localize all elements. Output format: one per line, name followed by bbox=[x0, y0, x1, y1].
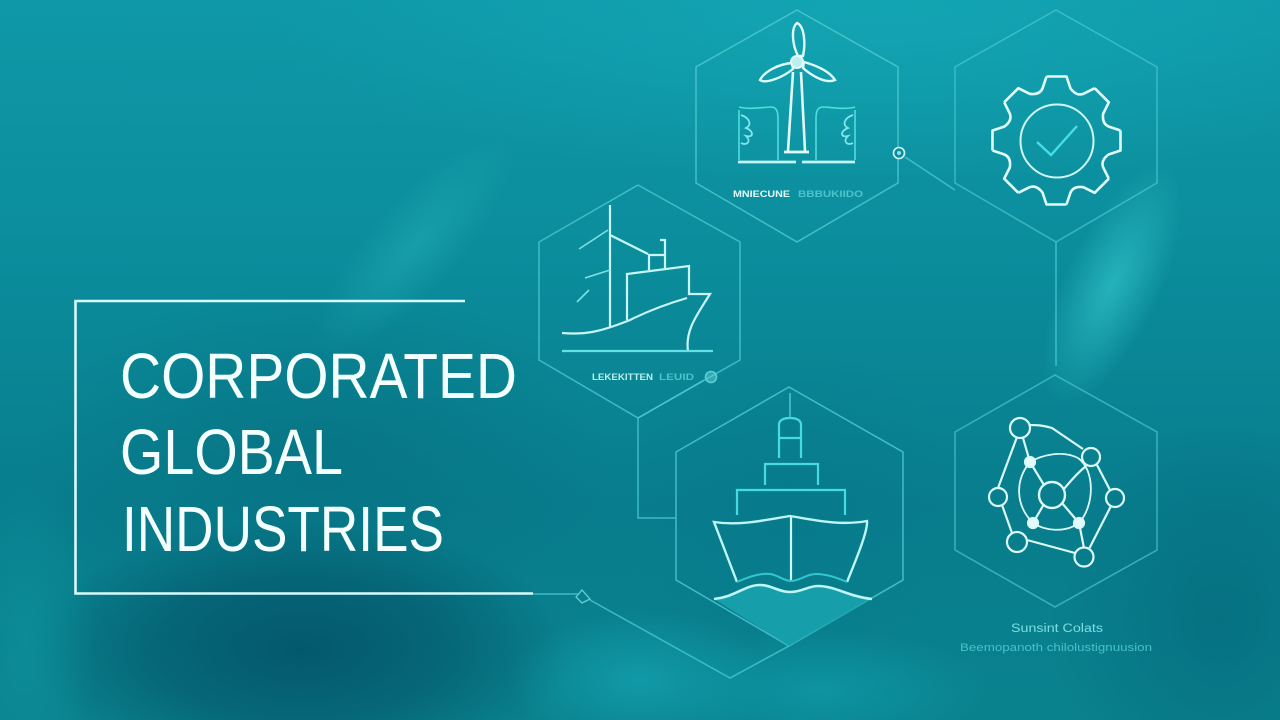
icon: wind turbine bbox=[738, 23, 855, 162]
label: network bbox=[960, 623, 1152, 654]
hexagon: gear bbox=[955, 10, 1157, 242]
label: cargo ship: LEKEKITTEN bbox=[592, 372, 653, 383]
hexagon: wind energy bbox=[696, 10, 898, 242]
title bbox=[120, 340, 517, 565]
title frame bbox=[76, 301, 533, 594]
hexagon: cargo ship bbox=[539, 185, 740, 418]
node: title connector bbox=[576, 590, 590, 603]
label: wind energy: BBBUKIIDO bbox=[798, 189, 863, 200]
connector lines bbox=[533, 157, 1056, 678]
node: wind connector bbox=[894, 148, 904, 158]
label: cargo ship bbox=[592, 372, 694, 383]
title: GLOBAL bbox=[120, 416, 343, 488]
label: wind energy bbox=[733, 189, 863, 200]
title: CORPORATED bbox=[120, 340, 517, 412]
icon: network bbox=[989, 418, 1124, 566]
icon: gear with check bbox=[984, 68, 1129, 213]
icon: cargo ship bbox=[562, 205, 713, 351]
label: cargo ship: LEUID bbox=[659, 372, 694, 383]
hexagon: network bbox=[955, 375, 1157, 607]
icon: front ship bbox=[714, 393, 872, 646]
hexagon: front ship bbox=[676, 387, 903, 646]
node: ship connector bbox=[706, 372, 716, 382]
label: network: Beemopanoth chilolustignuusion bbox=[960, 642, 1152, 654]
label: wind energy: MNIECUNE bbox=[733, 189, 790, 200]
title: INDUSTRIES bbox=[122, 493, 444, 565]
label: network: Sunsint Colats bbox=[1011, 623, 1103, 635]
